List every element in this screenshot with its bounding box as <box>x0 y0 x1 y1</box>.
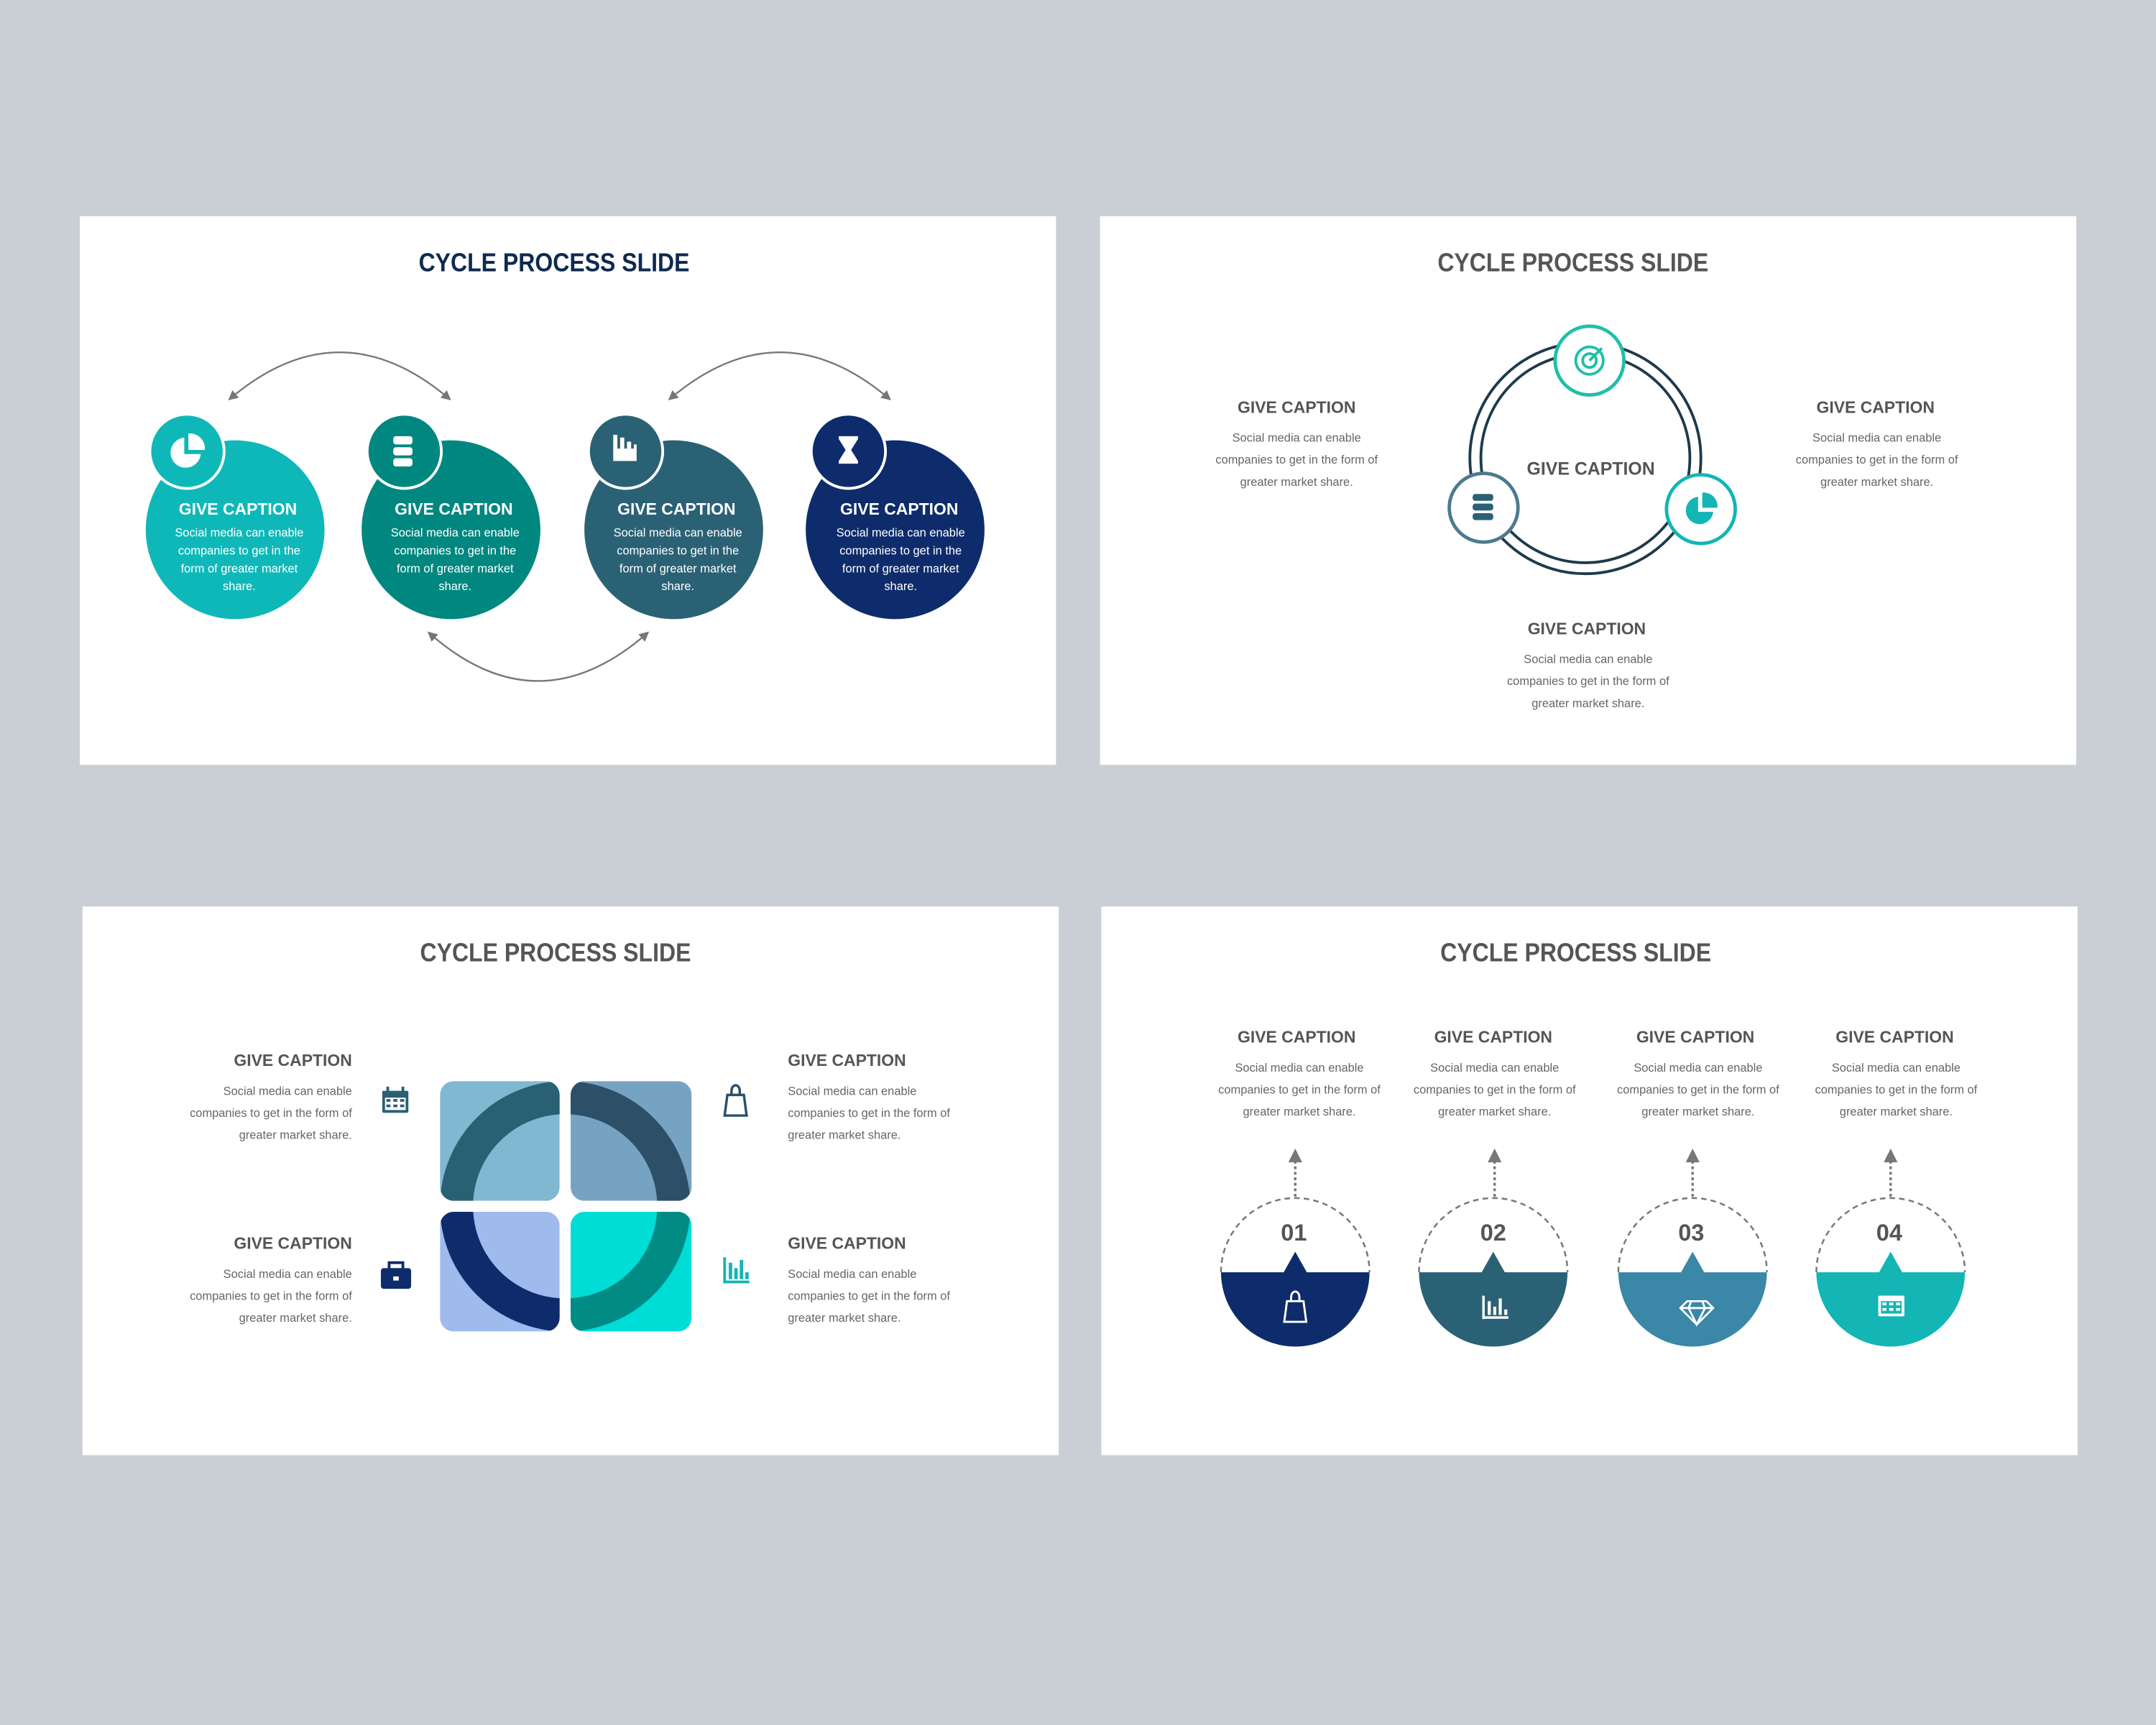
step 04: Social media can enable <box>1832 1062 1961 1075</box>
step 4 circle: form of greater market <box>842 562 959 575</box>
text: bottom left caption: greater market share. <box>239 1312 352 1325</box>
title slide 2: CYCLE PROCESS SLIDE <box>1437 247 1708 277</box>
text: top right caption: Social media can enable <box>788 1085 916 1098</box>
text: bottom caption <box>1507 619 1669 710</box>
text: bottom right caption: GIVE CAPTION <box>788 1234 906 1253</box>
text: bottom right caption <box>788 1234 950 1325</box>
step 1 circle <box>146 414 325 619</box>
text: left caption: greater market share. <box>1240 476 1353 489</box>
text: top left caption <box>190 1051 352 1142</box>
step 04: GIVE CAPTION <box>1835 1028 1954 1046</box>
panel: slide 2 ring <box>1100 216 2076 765</box>
step 02: Social media can enable <box>1430 1062 1559 1075</box>
step 2 circle: GIVE CAPTION <box>395 500 513 518</box>
icon: briefcase <box>381 1263 411 1289</box>
text: top left caption: greater market share. <box>239 1129 352 1142</box>
text: top right caption: GIVE CAPTION <box>788 1051 906 1070</box>
icon: bar chart <box>723 1257 750 1283</box>
step 4 circle: GIVE CAPTION <box>840 500 958 518</box>
text: left caption: companies to get in the form of <box>1215 454 1378 466</box>
text: right caption <box>1796 397 1958 489</box>
text: bottom caption: greater market share. <box>1531 697 1644 710</box>
center caption: GIVE CAPTION <box>1527 459 1655 479</box>
step 4 circle <box>806 414 985 619</box>
icon: target <box>1555 326 1624 395</box>
step 3 circle: companies to get in the <box>617 544 739 557</box>
step 4 circle: Social media can enable <box>837 527 965 540</box>
step 01: greater market share. <box>1243 1105 1356 1118</box>
text: right caption: Social media can enable <box>1812 432 1941 445</box>
text: bottom left caption: Social media can enable <box>224 1268 352 1281</box>
step 1 circle: form of greater market <box>181 562 298 575</box>
step 2 circle: form of greater market <box>397 562 514 575</box>
step 02: greater market share. <box>1438 1105 1551 1118</box>
step 04: companies to get in the form of <box>1815 1083 1978 1096</box>
step 02 <box>1414 1028 1576 1346</box>
arrow: bottom arc <box>429 632 648 681</box>
text: bottom left caption: GIVE CAPTION <box>234 1234 352 1253</box>
text: right caption: GIVE CAPTION <box>1816 397 1935 416</box>
text: bottom right caption: Social media can enable <box>788 1268 916 1281</box>
text: right caption: companies to get in the form of <box>1796 454 1958 466</box>
step 01 <box>1218 1028 1381 1346</box>
step 01: companies to get in the form of <box>1218 1083 1381 1096</box>
arrow: top right arc <box>670 352 890 399</box>
step 03: Social media can enable <box>1634 1062 1762 1075</box>
text: top right caption: greater market share. <box>788 1129 900 1142</box>
title slide 1: CYCLE PROCESS SLIDE <box>419 247 690 277</box>
step 2 circle: Social media can enable <box>391 527 520 540</box>
step 02: 02 <box>1480 1220 1506 1246</box>
step 1 circle: Social media can enable <box>175 527 303 540</box>
text: top left caption: GIVE CAPTION <box>234 1051 352 1070</box>
step 01: Social media can enable <box>1235 1062 1364 1075</box>
text: bottom caption: GIVE CAPTION <box>1528 619 1646 638</box>
ring <box>1470 343 1701 574</box>
text: right caption: greater market share. <box>1820 476 1933 489</box>
step 4 circle: share. <box>884 580 917 593</box>
icon: pie <box>1667 474 1736 543</box>
text: bottom caption: Social media can enable <box>1524 653 1652 666</box>
step 04: 04 <box>1876 1220 1902 1246</box>
step 03: GIVE CAPTION <box>1636 1028 1754 1046</box>
step 04: greater market share. <box>1840 1105 1953 1118</box>
text: top right caption: companies to get in the form of <box>788 1107 950 1120</box>
step 1 circle: share. <box>223 580 256 593</box>
title slide 3: CYCLE PROCESS SLIDE <box>420 938 691 967</box>
title slide 4: CYCLE PROCESS SLIDE <box>1440 938 1711 967</box>
step 3 circle: GIVE CAPTION <box>617 500 736 518</box>
text: bottom caption: companies to get in the form of <box>1507 675 1669 688</box>
text: top right caption <box>788 1051 950 1142</box>
step 4 circle: companies to get in the <box>839 544 962 557</box>
step 3 circle: form of greater market <box>619 562 737 575</box>
step 01: 01 <box>1281 1220 1307 1246</box>
step 3 circle: share. <box>661 580 694 593</box>
step 2 circle <box>361 414 540 619</box>
quadrant graphic <box>440 1081 691 1331</box>
step 3 circle: Social media can enable <box>614 527 742 540</box>
step 2 circle: companies to get in the <box>394 544 516 557</box>
text: bottom right caption: greater market share. <box>788 1312 900 1325</box>
step 02: companies to get in the form of <box>1414 1083 1576 1096</box>
step 03: companies to get in the form of <box>1617 1083 1779 1096</box>
arrow: top left arc <box>230 352 450 399</box>
step 01: GIVE CAPTION <box>1238 1028 1355 1046</box>
panel: slide 1 circles <box>80 216 1056 765</box>
text: left caption <box>1215 397 1378 489</box>
text: bottom left caption <box>190 1234 352 1325</box>
step 03: 03 <box>1678 1220 1704 1246</box>
step 03 <box>1617 1028 1779 1346</box>
text: bottom left caption: companies to get in the form of <box>190 1289 352 1302</box>
step 3 circle <box>584 414 763 619</box>
step 04 <box>1815 1028 1978 1346</box>
text: left caption: Social media can enable <box>1233 432 1361 445</box>
text: left caption: GIVE CAPTION <box>1238 397 1355 416</box>
panel: slide 4 numbered steps <box>1102 906 2078 1455</box>
step 2 circle: share. <box>438 580 471 593</box>
step 1 circle: companies to get in the <box>178 544 300 557</box>
text: top left caption: companies to get in the form of <box>190 1107 352 1120</box>
icon: database <box>1450 474 1518 542</box>
icon: bag <box>724 1085 747 1116</box>
icon: calendar <box>382 1087 408 1113</box>
step 03: greater market share. <box>1641 1105 1754 1118</box>
step 1 circle: GIVE CAPTION <box>179 500 297 518</box>
step 02: GIVE CAPTION <box>1434 1028 1552 1046</box>
panel: slide 3 quadrants <box>83 906 1059 1455</box>
text: top left caption: Social media can enable <box>224 1085 352 1098</box>
text: bottom right caption: companies to get in the form of <box>788 1289 950 1302</box>
